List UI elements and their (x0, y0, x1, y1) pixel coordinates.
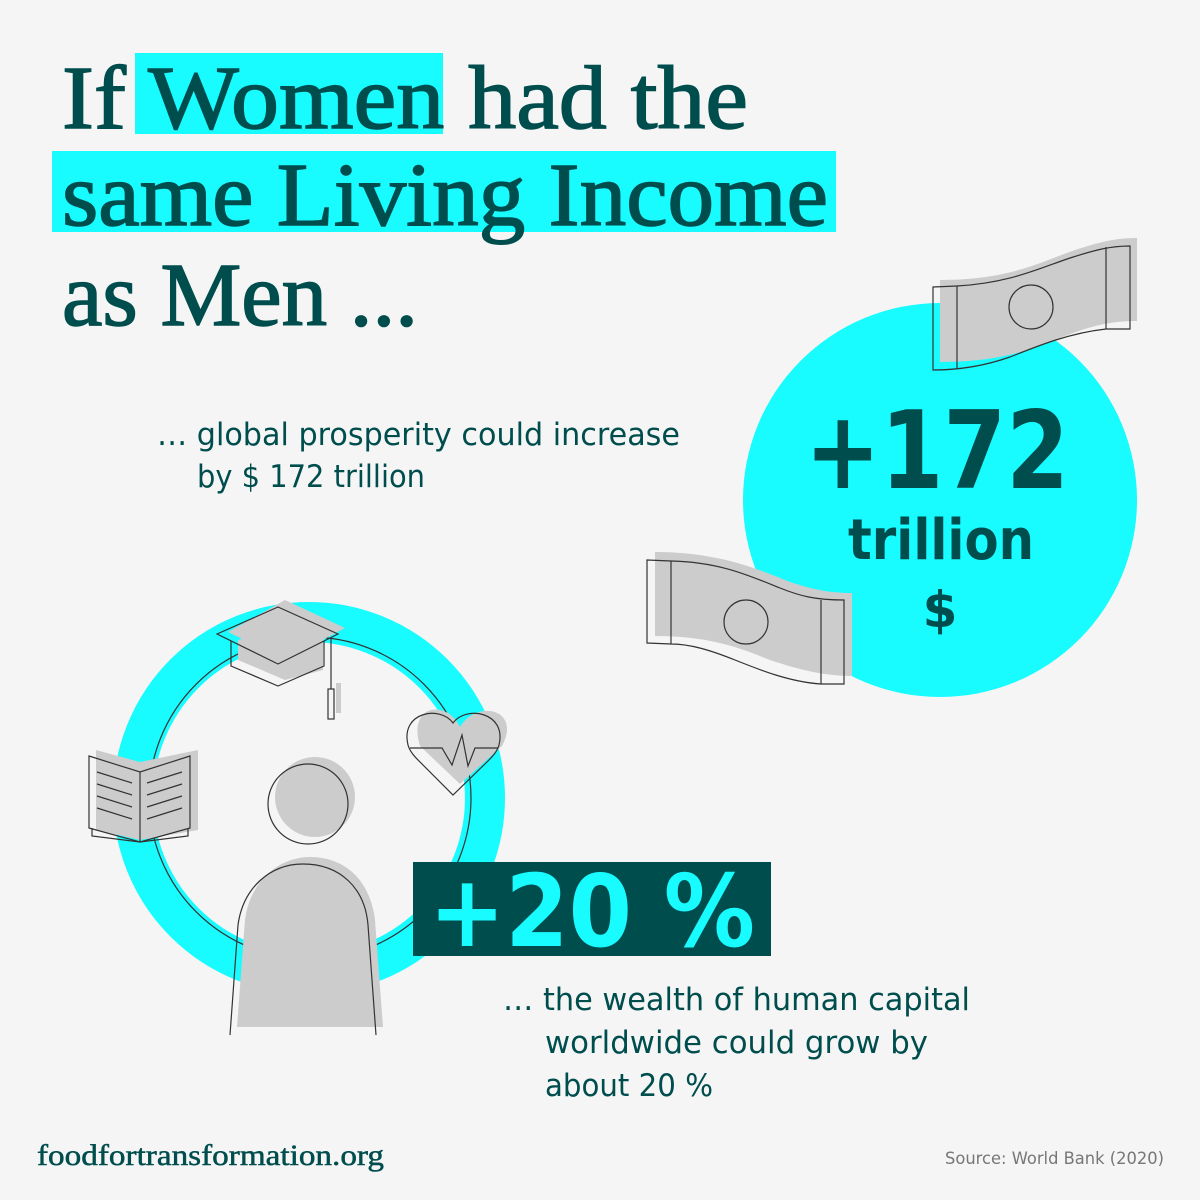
title: same Living Income (62, 146, 828, 245)
title: If Women had the (62, 49, 748, 148)
title: as Men ... (62, 246, 418, 345)
big cyan circle with +172 (743, 303, 1137, 697)
icon: graduation cap (217, 600, 345, 719)
big cyan circle with +172: $ (923, 581, 957, 639)
footer: source: Source: World Bank (2020) (945, 1149, 1164, 1169)
text block: human capital: worldwide could grow by (545, 1025, 928, 1061)
+20% box: +20 % (429, 853, 755, 970)
big cyan circle with +172: +172 (805, 389, 1069, 514)
text block: human capital: … the wealth of human capital (503, 982, 970, 1018)
big cyan circle with +172: trillion (848, 508, 1034, 573)
icon: heart (407, 709, 507, 795)
footer: website: foodfortransformation.org (37, 1139, 384, 1172)
text block: human capital: about 20 % (545, 1068, 713, 1104)
icon: book (89, 750, 198, 842)
title (52, 49, 836, 345)
cyan ring (133, 622, 485, 974)
icon: bottom bill (647, 552, 852, 684)
icon: person (230, 757, 383, 1035)
text block: prosperity (157, 417, 680, 495)
text block: prosperity: by $ 172 trillion (197, 459, 425, 495)
text block: prosperity: … global prosperity could increase (157, 417, 680, 453)
icon: top bill (933, 238, 1137, 370)
text block: human capital (503, 982, 970, 1104)
